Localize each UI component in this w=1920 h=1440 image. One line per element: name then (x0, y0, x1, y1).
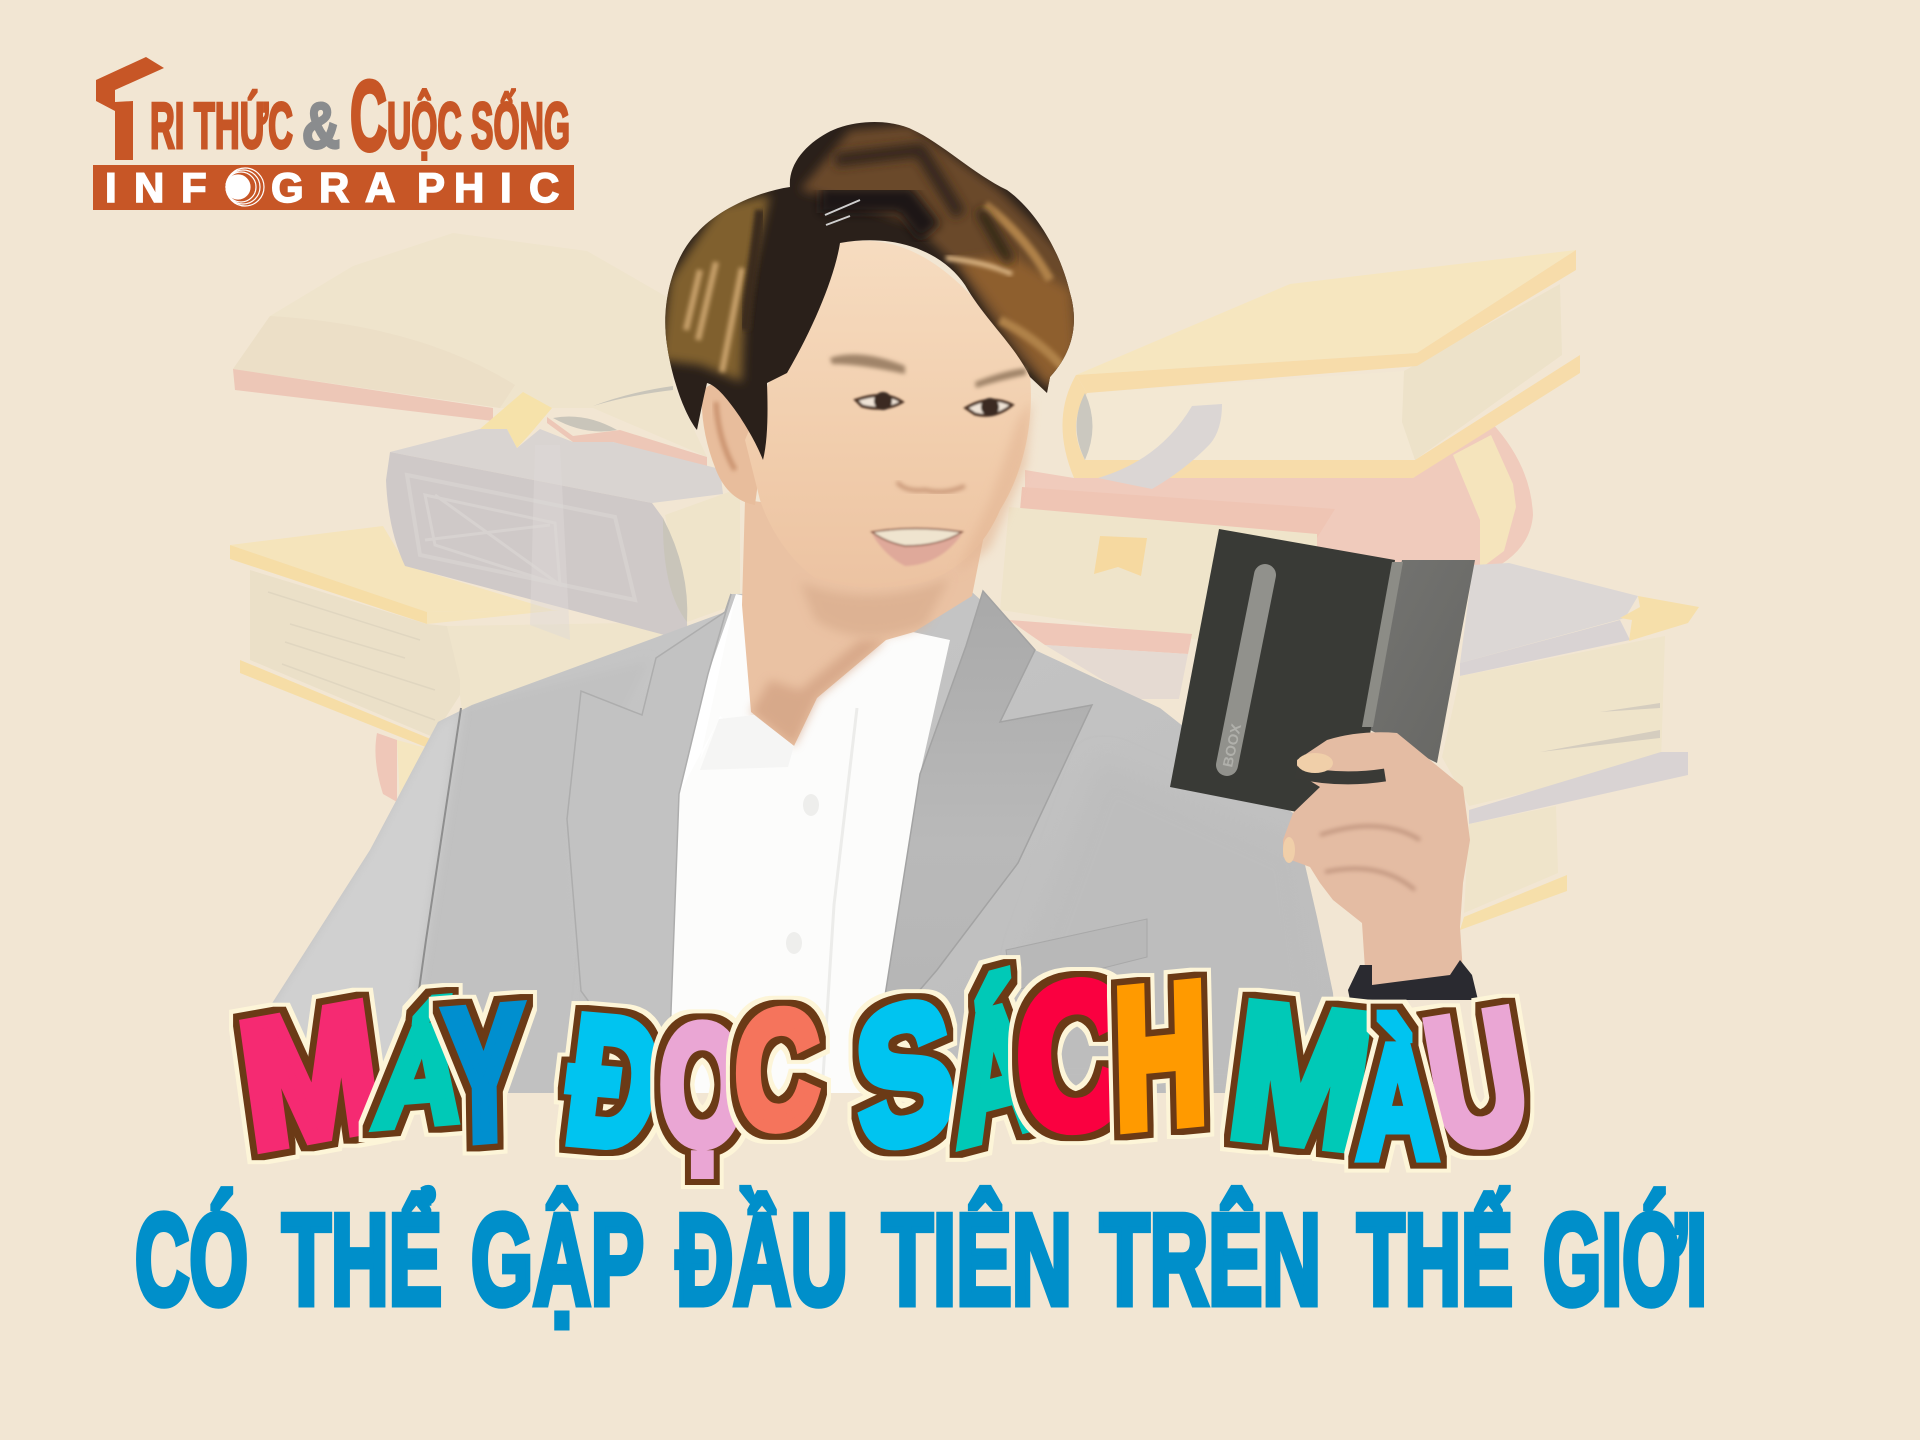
letter Á: Á (942, 963, 1049, 1183)
logo swirl icon (226, 168, 264, 206)
right lapel (868, 591, 1092, 1093)
letter Á: Á (369, 994, 471, 1157)
letter À: À (1357, 1014, 1438, 1192)
letter S: S (849, 957, 960, 1192)
jacket (245, 592, 1340, 1093)
pink book (1000, 422, 1533, 699)
collar (679, 594, 794, 794)
shirt cuff (1348, 960, 1478, 1000)
letter C: C (735, 975, 819, 1166)
nose (897, 482, 965, 492)
subtitle (135, 1187, 1707, 1332)
eyebrows (830, 354, 1026, 388)
e-reader: BOOX (1219, 722, 1244, 769)
ear (702, 384, 765, 505)
jacket pocket (1006, 919, 1147, 991)
hair (660, 122, 1080, 460)
letter U: U (1413, 970, 1541, 1187)
subtitle: THỂ (282, 1187, 442, 1332)
logo wordmark: RI THỨC (150, 89, 293, 162)
logo T mark (96, 57, 164, 160)
face (745, 241, 1031, 588)
hand (1283, 732, 1473, 1000)
eyes (856, 392, 1012, 416)
subtitle: TRÊN (1100, 1187, 1321, 1332)
neck (742, 500, 985, 746)
illustration: stacked books (230, 233, 1699, 930)
open book (233, 233, 707, 469)
letter C: C (1012, 938, 1133, 1177)
top-right book (1062, 250, 1580, 489)
logo wordmark: C (350, 60, 387, 171)
neck shadow (751, 640, 886, 746)
infographic canvas (93, 57, 1704, 1330)
subtitle: THẾ (1357, 1187, 1513, 1332)
left lapel (567, 594, 731, 1093)
subtitle: TIÊN (882, 1187, 1072, 1332)
logo: Tri Thức & Cuộc Sống Infographic (93, 57, 574, 211)
face shading (955, 400, 1032, 575)
letter M: M (1220, 964, 1382, 1189)
purple hardcover book (386, 392, 740, 641)
letter Ọ: Ọ (660, 991, 745, 1180)
mouth (872, 528, 962, 566)
shirt placket and buttons (786, 708, 857, 1093)
man holding the foldable e-reader (245, 122, 1478, 1093)
logo wordmark (150, 60, 570, 171)
logo banner text: INFGRAPHIC (105, 164, 559, 211)
lower-left book (230, 526, 700, 802)
letter Y: Y (443, 966, 524, 1180)
logo wordmark: UỘC SỐNG (387, 89, 570, 162)
e-reader (1170, 529, 1475, 812)
subtitle: ĐẦU (676, 1187, 848, 1332)
chin shadow (800, 578, 950, 636)
title: MÁY ĐỌC SÁCH MÀU (230, 938, 1541, 1192)
shirt (668, 594, 950, 1093)
subtitle: GẬP (471, 1187, 644, 1332)
logo banner (93, 165, 574, 210)
subtitle: CÓ (135, 1188, 248, 1332)
logo wordmark: & (302, 89, 340, 162)
letter H: H (1112, 943, 1209, 1170)
letter M: M (230, 966, 391, 1187)
lower-right book (1442, 563, 1699, 930)
letter Đ: Đ (557, 979, 670, 1186)
subtitle: GIỚI (1543, 1188, 1707, 1332)
